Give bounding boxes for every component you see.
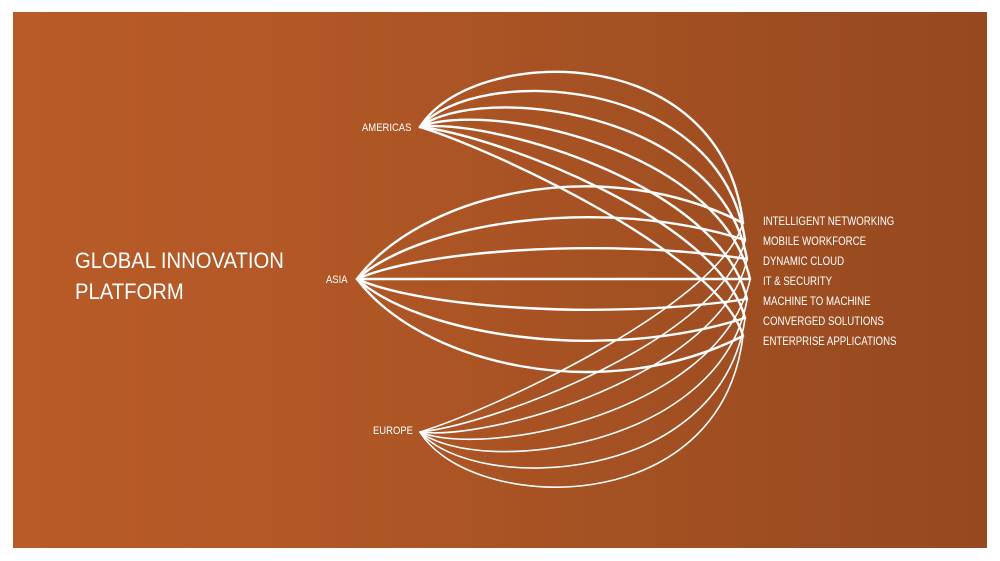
arcs: asia <box>357 186 750 372</box>
title <box>75 248 284 304</box>
label: americas: AMERICAS <box>362 122 411 134</box>
list: solutions: DYNAMIC CLOUD <box>763 256 844 268</box>
list: solutions: ENTERPRISE APPLICATIONS <box>763 336 896 348</box>
list: solutions: CONVERGED SOLUTIONS <box>763 316 884 328</box>
title: PLATFORM <box>75 279 184 304</box>
list: solutions: MACHINE TO MACHINE <box>763 296 871 308</box>
list: solutions: IT & SECURITY <box>763 276 832 288</box>
arcs: europe <box>420 223 750 487</box>
label: asia: ASIA <box>326 274 348 286</box>
title: GLOBAL INNOVATION <box>75 248 284 273</box>
list: solutions: INTELLIGENT NETWORKING <box>763 216 894 228</box>
list: solutions <box>763 216 896 348</box>
label: europe: EUROPE <box>373 425 413 437</box>
list: solutions: MOBILE WORKFORCE <box>763 236 866 248</box>
arcs: americas <box>420 72 750 336</box>
